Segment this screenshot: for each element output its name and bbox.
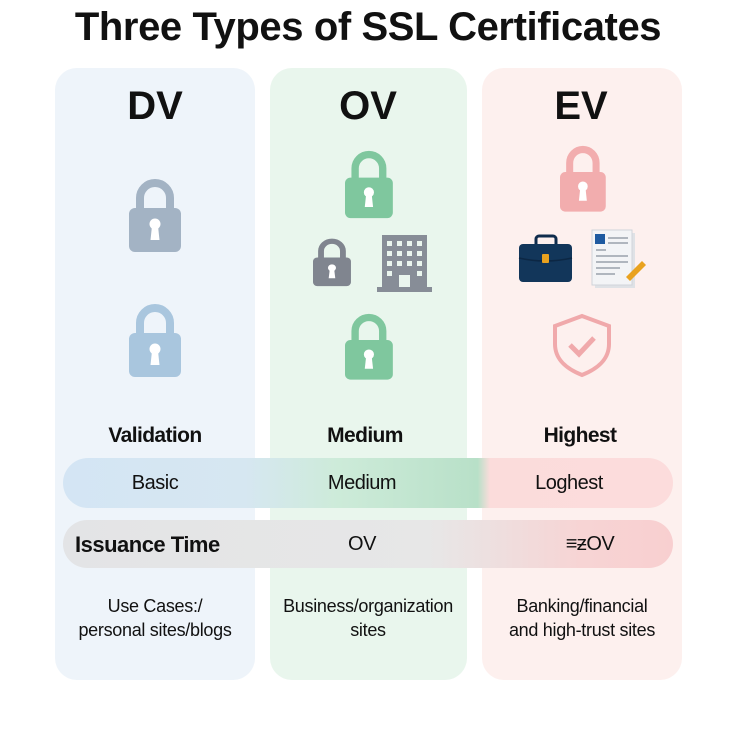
icon: DV lock 2: [129, 308, 181, 377]
icon: OV lock 1: [345, 155, 393, 218]
icon: building: [377, 235, 432, 292]
text: OV use cases: Business/organization: [283, 596, 453, 616]
panel: OV: [270, 68, 467, 680]
text: DV use cases: Use Cases:/: [108, 596, 202, 616]
label: Medium: Medium: [327, 424, 403, 447]
icon: briefcase: [519, 236, 572, 282]
heading DV: DV: [127, 84, 183, 128]
text: Medium: Medium: [328, 472, 396, 494]
text: EV time: ≡ƶOV: [566, 533, 614, 555]
icon: DV lock 1: [129, 183, 181, 252]
text: EV use cases: [509, 596, 655, 640]
label: Validation: Validation: [108, 424, 202, 447]
icon: EV lock: [560, 150, 606, 212]
text: EV use cases: and high-trust sites: [509, 620, 655, 640]
text: OV: OV: [348, 533, 376, 555]
text: Issuance Time: Issuance Time: [75, 532, 220, 557]
text: Loghest: Loghest: [535, 472, 603, 494]
title: Three Types of SSL Certificates: [75, 5, 661, 49]
text: DV use cases: [78, 596, 232, 640]
row: validation level: [63, 458, 673, 508]
heading EV: EV: [554, 84, 608, 128]
label: Highest: Highest: [544, 424, 616, 447]
icon: shield: [555, 316, 609, 375]
panel: DV: [55, 68, 255, 680]
text: OV use cases: sites: [350, 620, 386, 640]
icon: document: [592, 230, 646, 288]
text: OV use cases: [283, 596, 453, 640]
text: Basic: Basic: [132, 472, 178, 494]
icon: OV small lock: [313, 241, 351, 286]
icon: OV lock 2: [345, 318, 393, 380]
row: issuance time: [63, 520, 673, 568]
panel: EV: [482, 68, 682, 680]
text: EV use cases: Banking/financial: [516, 596, 648, 616]
heading OV: OV: [339, 84, 397, 128]
text: DV use cases: personal sites/blogs: [78, 620, 232, 640]
